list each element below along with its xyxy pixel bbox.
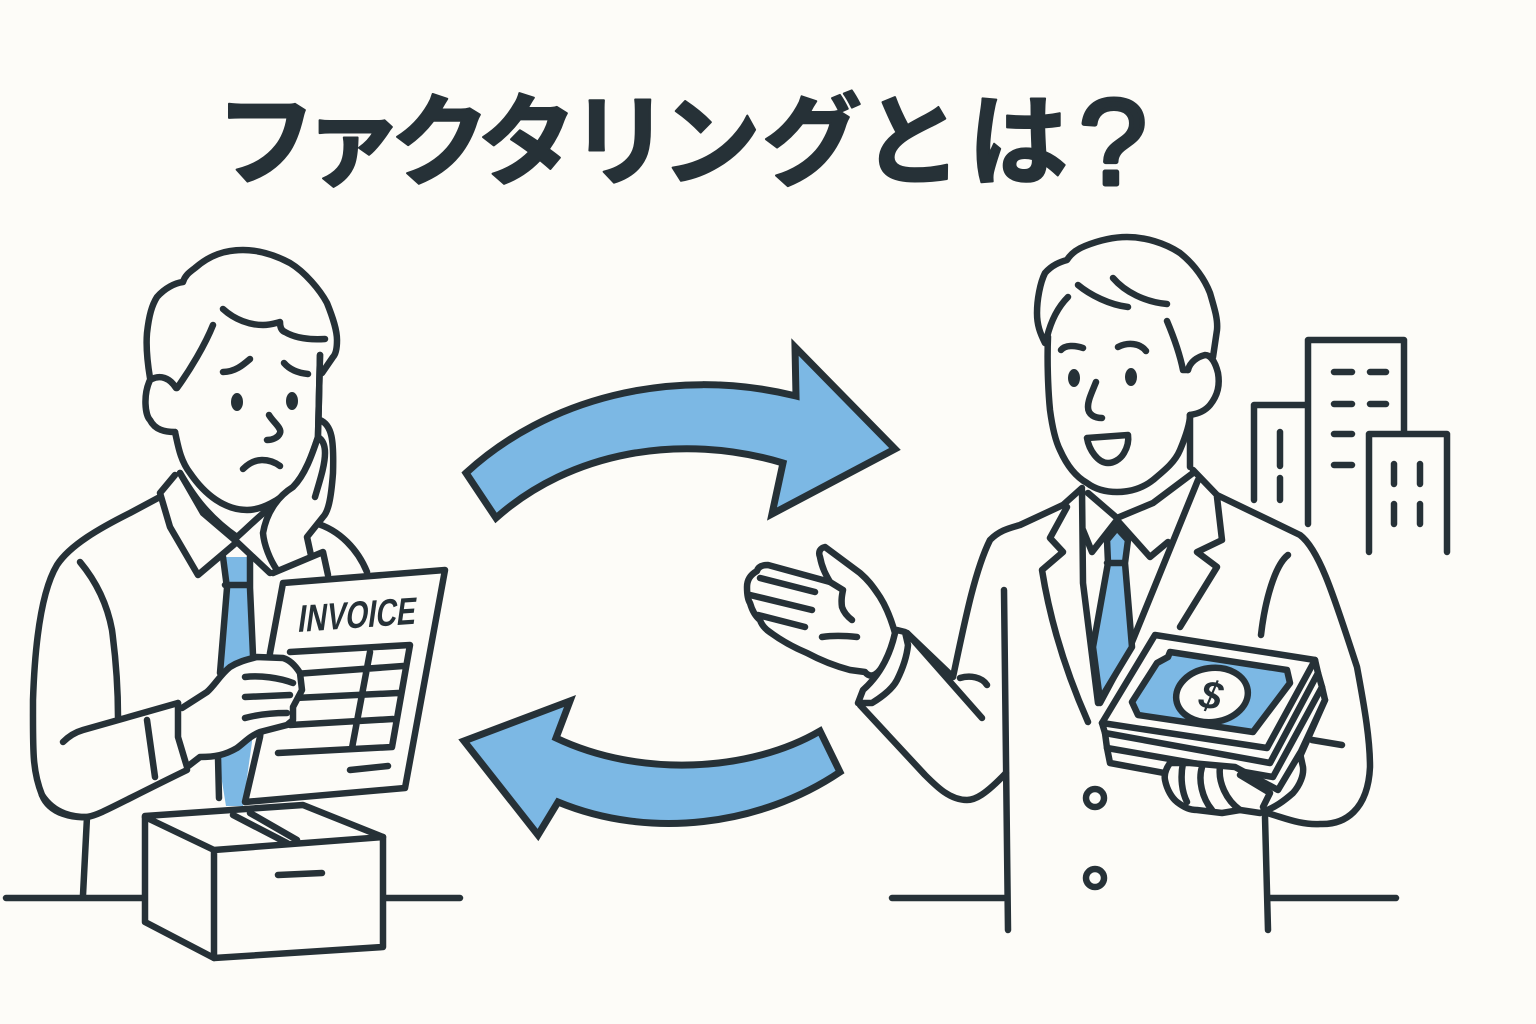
person: factoring company agent with cash bbox=[747, 237, 1447, 930]
torso bbox=[33, 498, 367, 895]
banknote face bbox=[1132, 652, 1290, 732]
head bbox=[175, 355, 320, 510]
floor line right bbox=[892, 895, 1396, 901]
title: ? bbox=[1079, 74, 1147, 210]
coin bbox=[1173, 663, 1251, 727]
hand on cheek bbox=[263, 355, 333, 572]
fringe bbox=[223, 309, 325, 339]
holding hand bbox=[178, 657, 302, 767]
lapels bbox=[1042, 480, 1222, 722]
neckline bbox=[180, 473, 267, 537]
jacket details bbox=[907, 555, 1342, 930]
neck bbox=[1187, 415, 1193, 467]
nose bbox=[267, 415, 280, 440]
eyebrows bbox=[1061, 344, 1146, 351]
finger lines bbox=[750, 578, 857, 637]
jacket bbox=[860, 470, 1370, 824]
right body vertical bbox=[1265, 817, 1268, 930]
hair bbox=[147, 250, 337, 388]
mouth bbox=[243, 460, 280, 469]
top banknote bbox=[1102, 635, 1315, 748]
tie bbox=[218, 557, 253, 806]
right collar flap bbox=[273, 552, 328, 575]
eye left bbox=[1068, 369, 1080, 387]
sleeve details bbox=[42, 562, 187, 817]
eye right bbox=[286, 392, 298, 410]
box bbox=[145, 805, 383, 958]
cash stack bbox=[1102, 635, 1325, 813]
jacket button lower bbox=[1086, 869, 1104, 887]
invoice table bbox=[278, 645, 410, 770]
head bbox=[1048, 337, 1190, 492]
desk line left bbox=[6, 895, 460, 901]
open hand bbox=[747, 547, 895, 676]
shirt collar bbox=[160, 473, 270, 575]
ear bbox=[1188, 355, 1219, 415]
hair bbox=[1037, 237, 1217, 370]
arrow: top, pointing right bbox=[466, 347, 895, 518]
cuff bbox=[858, 630, 908, 703]
nose bbox=[1088, 382, 1102, 418]
title: ファクタリングとは bbox=[216, 87, 1068, 199]
tie bbox=[1093, 528, 1132, 700]
jacket button upper bbox=[1086, 789, 1104, 807]
finger lines bbox=[245, 676, 293, 718]
worried eyebrows bbox=[223, 359, 308, 374]
invoice: INVOICE bbox=[296, 590, 419, 641]
arrow: bottom, pointing left bbox=[464, 701, 840, 835]
cash holding hand bbox=[1165, 753, 1303, 813]
eye left bbox=[231, 393, 243, 411]
invoice bbox=[245, 570, 445, 802]
collar bbox=[1083, 473, 1193, 557]
cash stack: $ bbox=[1194, 672, 1227, 720]
smiling mouth bbox=[1087, 435, 1128, 463]
eye right bbox=[1125, 368, 1137, 386]
ear bbox=[145, 377, 176, 432]
buildings bbox=[1254, 340, 1447, 552]
hair strokes bbox=[1078, 278, 1167, 307]
person: worried client with invoice bbox=[6, 250, 460, 958]
